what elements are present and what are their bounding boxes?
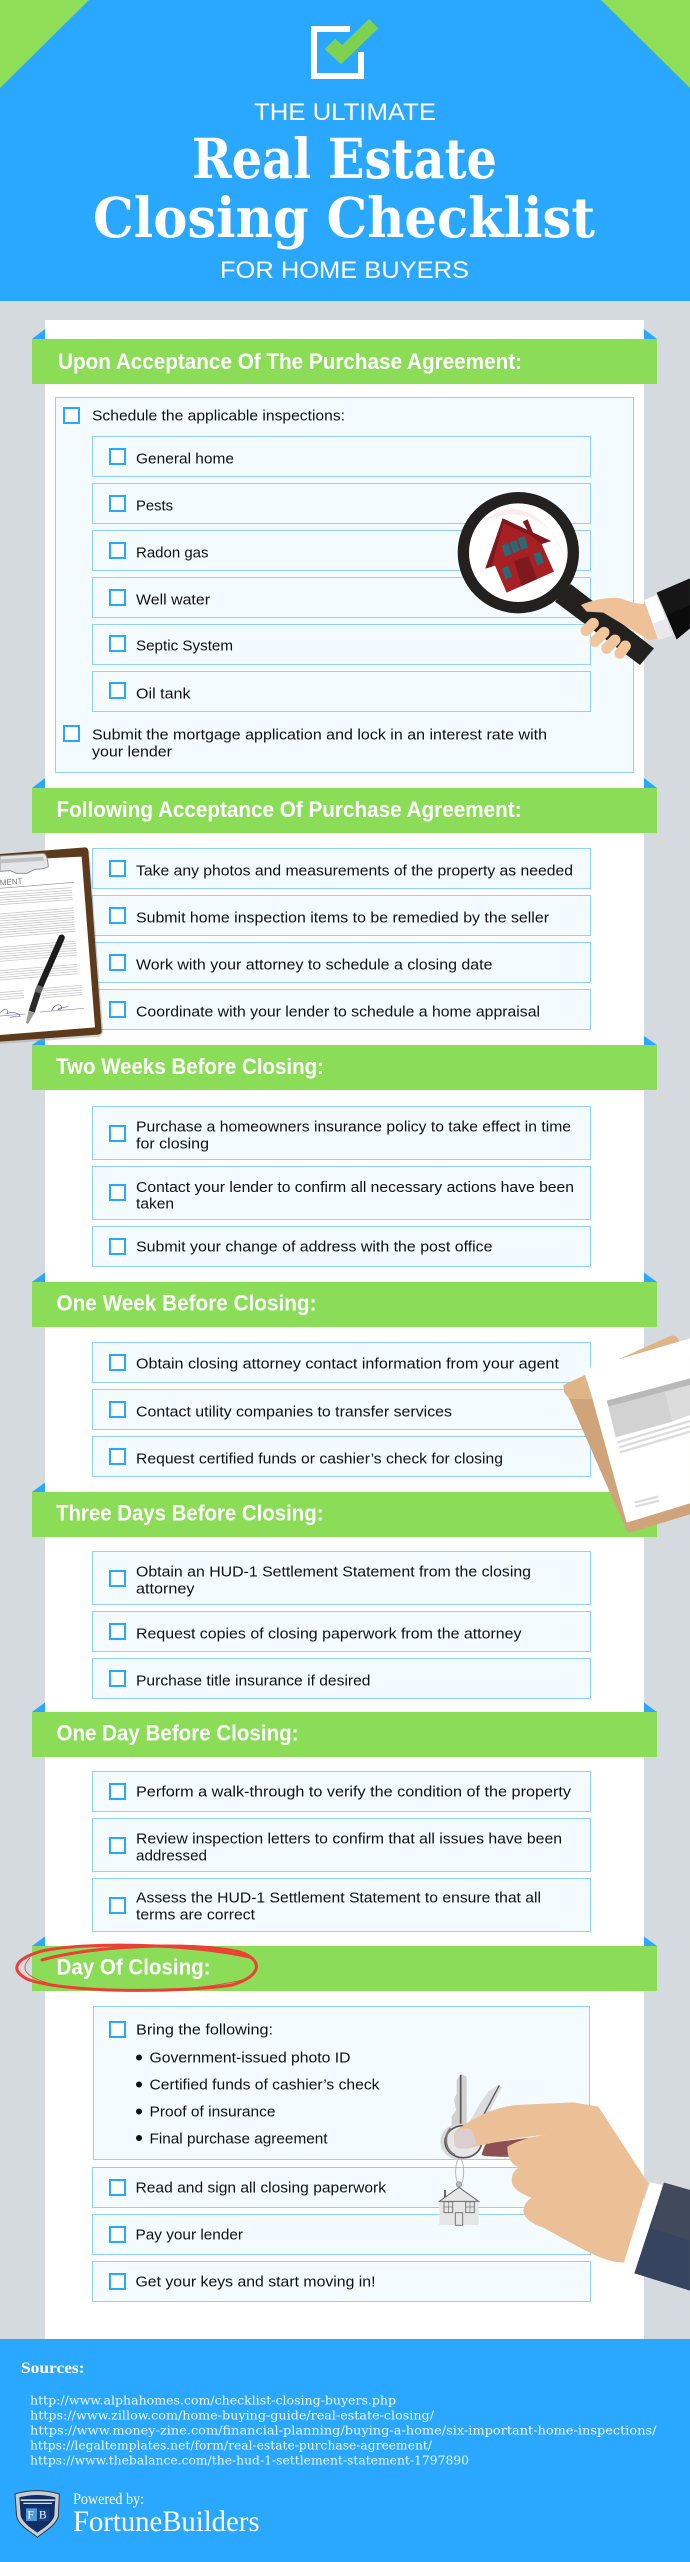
title: Closing Checklist bbox=[93, 185, 596, 250]
bring list box: Certified funds of cashier’s check bbox=[150, 2076, 380, 2094]
section: three days bbox=[32, 1482, 657, 1698]
section: following acceptance: Following Acceptance Of Purchase Agreement: bbox=[56, 797, 522, 822]
section: day of closing: Get your keys and start moving in! bbox=[136, 2274, 376, 2290]
section: one week: Contact utility companies to transfer services bbox=[136, 1404, 452, 1420]
section: three days: Purchase title insurance if desired bbox=[136, 1672, 370, 1690]
section: one day: terms are correct bbox=[136, 1906, 256, 1924]
illustration: clipboard with agreement bbox=[0, 847, 103, 1044]
clip bbox=[0, 853, 48, 873]
section: three days: Three Days Before Closing: bbox=[56, 1500, 324, 1526]
section: day of closing: Read and sign all closing paperwork bbox=[136, 2180, 387, 2196]
source links: https://www.money-zine.com/financial-planning/buying-a-home/six-important-home-inspections/ bbox=[30, 2422, 657, 2438]
inspections box: Well water bbox=[136, 592, 210, 608]
footer bbox=[0, 2339, 690, 2562]
section: three days: Obtain an HUD-1 Settlement Statement from the closing bbox=[136, 1564, 531, 1580]
section: following acceptance: Take any photos and measurements of the property as needed bbox=[136, 862, 573, 880]
bring list box: Government-issued photo ID bbox=[150, 2050, 351, 2066]
logo: FortuneBuilders shield bbox=[15, 2491, 59, 2537]
title: THE ULTIMATE bbox=[254, 99, 436, 126]
hand holding handle bbox=[581, 598, 658, 653]
sources heading: Sources: bbox=[21, 2360, 84, 2377]
section: three days: attorney bbox=[136, 1580, 195, 1598]
red hand-drawn circle bbox=[17, 1945, 256, 1990]
bring list box: Proof of insurance bbox=[150, 2104, 276, 2120]
section: upon acceptance: Upon Acceptance Of The Purchase Agreement: bbox=[58, 349, 522, 374]
pen bbox=[26, 938, 62, 1024]
illustration: envelope with papers bbox=[563, 1336, 690, 1532]
section: one week bbox=[32, 1272, 657, 1476]
section: two weeks: taken bbox=[136, 1196, 174, 1212]
source links: https://legaltemplates.net/form/real-estate-purchase-agreement/ bbox=[30, 2438, 433, 2452]
section: upon acceptance bbox=[32, 329, 657, 772]
section: two weeks: Contact your lender to confirm all necessary actions have been bbox=[136, 1179, 574, 1196]
section: day of closing: Pay your lender bbox=[136, 2226, 243, 2244]
sleeve bbox=[624, 2182, 690, 2291]
section: following acceptance: Work with your attorney to schedule a closing date bbox=[136, 956, 492, 974]
powered by wordmark bbox=[73, 2491, 260, 2538]
source links: http://www.alphahomes.com/checklist-closing-buyers.php bbox=[30, 2392, 396, 2408]
section: two weeks: for closing bbox=[136, 1136, 209, 1152]
illustration: magnifying glass over house bbox=[463, 498, 690, 665]
bring list box: Final purchase agreement bbox=[150, 2130, 328, 2148]
inspections box: Pests bbox=[136, 498, 173, 514]
logo: FortuneBuilders shield: F bbox=[27, 2510, 34, 2522]
section: one day bbox=[32, 1702, 657, 1932]
hand bbox=[454, 2102, 648, 2263]
inspections box: Schedule the applicable inspections: bbox=[92, 408, 345, 424]
inspections box: Radon gas bbox=[136, 544, 208, 562]
section: one week: Obtain closing attorney contact information from your agent bbox=[136, 1356, 560, 1372]
section: following acceptance: Coordinate with your lender to schedule a home appraisal bbox=[136, 1004, 540, 1020]
inspections box: General home bbox=[136, 450, 234, 468]
source links bbox=[30, 2392, 657, 2468]
inspections box: Septic System bbox=[136, 638, 233, 654]
agreement heading: MENT bbox=[0, 877, 23, 887]
header bbox=[0, 0, 690, 301]
keys bbox=[439, 2074, 502, 2225]
section: one day: One Day Before Closing: bbox=[56, 1720, 298, 1746]
section: one day: Assess the HUD-1 Settlement Statement to ensure that all bbox=[136, 1890, 541, 1906]
section: one day: Perform a walk-through to verify the condition of the property bbox=[136, 1784, 572, 1800]
section: one week: Request certified funds or cashier’s check for closing bbox=[136, 1450, 503, 1468]
title bbox=[93, 99, 596, 284]
title: FOR HOME BUYERS bbox=[220, 257, 469, 284]
section: one week: One Week Before Closing: bbox=[56, 1290, 316, 1316]
section: day of closing: Day Of Closing: bbox=[56, 1954, 210, 1980]
section: one day: addressed bbox=[136, 1848, 207, 1864]
section: two weeks: Two Weeks Before Closing: bbox=[56, 1054, 324, 1079]
section: following acceptance bbox=[32, 778, 657, 1030]
section: following acceptance: Submit home inspection items to be remedied by the seller bbox=[136, 910, 549, 926]
section: one day: Review inspection letters to confirm that all issues have been bbox=[136, 1830, 562, 1848]
white content panel bbox=[45, 320, 644, 2339]
section: two weeks bbox=[32, 1036, 657, 1266]
title: Real Estate bbox=[192, 126, 497, 191]
section: day of closing bbox=[32, 1936, 657, 2302]
section: two weeks: Purchase a homeowners insurance policy to take effect in time bbox=[136, 1118, 571, 1136]
section: two weeks: Submit your change of address with the post office bbox=[136, 1238, 492, 1256]
inspections box: Oil tank bbox=[136, 686, 191, 702]
inspections box bbox=[56, 398, 634, 772]
inspections box: your lender bbox=[92, 744, 172, 760]
house bbox=[485, 518, 554, 593]
logo: FortuneBuilders shield: B bbox=[39, 2510, 47, 2522]
source links: https://www.thebalance.com/the-hud-1-settlement-statement-1797890 bbox=[30, 2452, 469, 2468]
powered by wordmark: FortuneBuilders bbox=[73, 2505, 260, 2538]
source links: https://www.zillow.com/home-buying-guide/real-estate-closing/ bbox=[30, 2408, 435, 2422]
powered by wordmark: Powered by: bbox=[73, 2491, 144, 2508]
bring list box bbox=[94, 2006, 590, 2160]
illustration: hand holding keys bbox=[439, 2074, 690, 2291]
bring list box: Bring the following: bbox=[136, 2022, 273, 2038]
inspections box: Submit the mortgage application and lock in an interest rate with bbox=[92, 726, 547, 744]
section: three days: Request copies of closing paperwork from the attorney bbox=[136, 1626, 522, 1642]
icon: checked box bbox=[314, 19, 378, 76]
